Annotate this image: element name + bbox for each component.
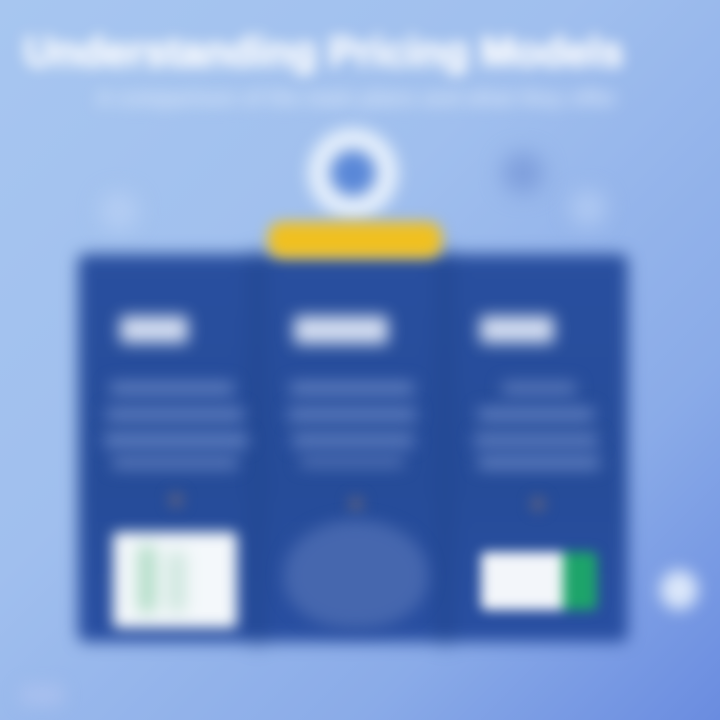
heading: column 1 (120, 316, 188, 343)
column divider right (438, 254, 452, 642)
text block: column 3 (469, 374, 605, 477)
icon: faded circle right (502, 152, 544, 194)
green detail (139, 546, 155, 612)
title: Understanding Pricing Models (24, 28, 624, 75)
green segment (563, 552, 597, 610)
icon: faded circle left (100, 192, 138, 230)
panel: comparison table (78, 254, 628, 642)
marker: column 3 (529, 495, 547, 513)
marker: column 2 (347, 495, 365, 513)
chart: white bar with green end (481, 552, 597, 610)
badge: highlighted plan (268, 222, 442, 258)
icon: faded circle far right (570, 190, 606, 226)
heading: column 2 (294, 316, 388, 344)
marker: column 1 (167, 491, 185, 509)
chart: white card with green detail (113, 532, 237, 628)
pale green detail (169, 552, 185, 612)
text block: column 1 (98, 374, 254, 476)
footer mark (20, 684, 64, 706)
heading: column 3 (480, 316, 554, 343)
text block: column 2 (283, 374, 421, 474)
column divider left (250, 254, 264, 642)
icon: glowing dot (660, 570, 698, 610)
icon: central ring (308, 128, 398, 218)
chart: faded circle (284, 520, 428, 628)
subtitle: A comparison of the main plans and what they offer (96, 87, 617, 110)
